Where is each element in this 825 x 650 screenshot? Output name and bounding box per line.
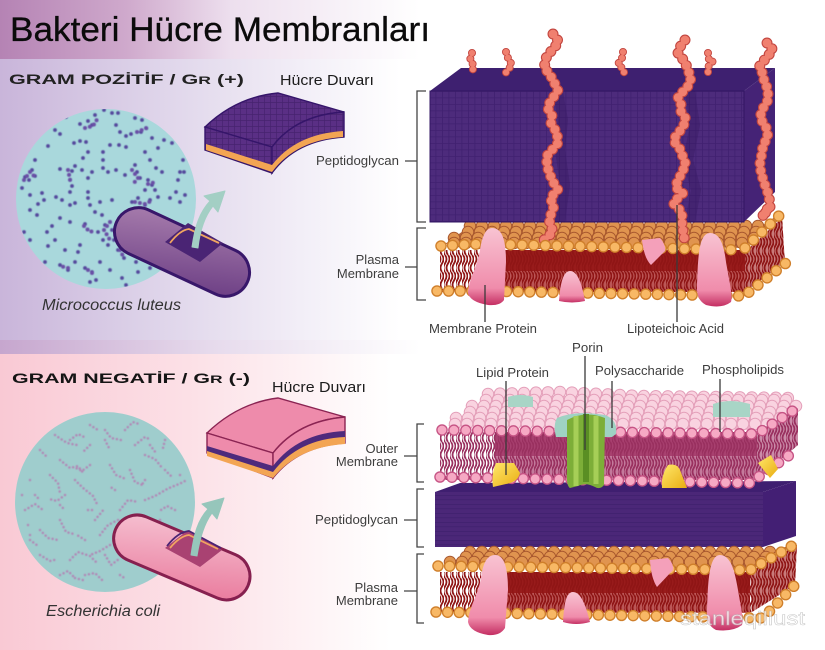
species label: Escherichia coli: Escherichia coli bbox=[46, 603, 161, 620]
watermark: stanleqillust bbox=[680, 609, 806, 630]
chain shadows bbox=[558, 92, 696, 222]
micrograph: Micrococcus luteus bbox=[16, 109, 196, 289]
cell wall block: gram positive bbox=[205, 93, 344, 173]
label: outer membrane: Outer bbox=[365, 441, 399, 456]
outer membrane tails bbox=[440, 408, 798, 480]
cut-away window bbox=[165, 223, 223, 262]
phospholipid heads bbox=[437, 212, 786, 296]
arrow: gram positive zoom bbox=[192, 191, 225, 248]
bracket: peptidoglycan bbox=[405, 91, 426, 222]
plasma membrane bbox=[436, 543, 797, 635]
label: plasma membrane: Membrane bbox=[337, 266, 399, 281]
bacterium: gram positive cell bbox=[107, 200, 257, 304]
polysaccharide bbox=[555, 413, 616, 437]
label: peptidoglycan: Peptidoglycan bbox=[316, 153, 399, 168]
leader line: polysaccharide bbox=[611, 381, 613, 428]
label: cell wall, gram negative: Hücre Duvarı bbox=[272, 380, 366, 396]
label: lipoteichoic acid: Lipoteichoic Acid bbox=[627, 321, 724, 336]
membrane proteins bbox=[468, 228, 732, 306]
arrow: gram negative zoom bbox=[191, 498, 224, 556]
membrane proteins bbox=[468, 555, 743, 635]
heading: gram negative: GRAM NEGATİF / G R (-) bbox=[12, 371, 250, 386]
label: phospholipids: Phospholipids bbox=[702, 362, 784, 377]
label: membrane protein: Membrane Protein bbox=[429, 321, 537, 336]
bracket: plasma membrane bbox=[404, 554, 424, 623]
label: lipid protein: Lipid Protein bbox=[476, 365, 549, 380]
cell wall block: gram negative bbox=[207, 398, 345, 478]
peptidoglycan block bbox=[435, 481, 796, 547]
species label: Micrococcus luteus: Micrococcus luteus bbox=[42, 297, 181, 314]
bracket: peptidoglycan bbox=[404, 489, 424, 547]
plasma membrane surface bbox=[445, 543, 797, 572]
plasma membrane surface bbox=[440, 216, 785, 292]
outer membrane heads bbox=[440, 408, 798, 483]
outer membrane bbox=[440, 392, 798, 488]
leader line: membrane protein bbox=[484, 285, 486, 322]
bracket: plasma membrane bbox=[405, 228, 426, 300]
bracket: outer membrane bbox=[404, 424, 424, 482]
bacterium: gram negative cell bbox=[106, 508, 257, 607]
lipid proteins bbox=[492, 455, 778, 488]
label: porin: Porin bbox=[572, 340, 603, 355]
porin bbox=[567, 414, 605, 488]
heading: gram positive: GRAM POZİTİF / G R (+) bbox=[9, 72, 244, 87]
title: Bakteri Hücre Membranları bbox=[10, 11, 430, 49]
leader line: lipoteichoic acid bbox=[676, 205, 678, 322]
lipoteichoic acid chains bbox=[470, 34, 773, 243]
lipoprotein teal patches bbox=[508, 395, 750, 417]
label: plasma membrane: Plasma bbox=[356, 252, 400, 267]
plasma membrane tails bbox=[440, 545, 797, 613]
label: plasma membrane: Plasma bbox=[355, 580, 399, 595]
label: outer membrane: Membrane bbox=[336, 454, 398, 469]
label: cell wall, gram positive: Hücre Duvarı bbox=[280, 73, 374, 89]
leader line: porin bbox=[584, 356, 586, 450]
leader line: phospholipids bbox=[719, 379, 721, 432]
outer membrane surface bbox=[448, 392, 798, 430]
panel: gram positive envelope diagram bbox=[316, 34, 786, 336]
cut-away window bbox=[165, 530, 222, 567]
leader line: lipid protein bbox=[505, 381, 507, 475]
panel: gram negative envelope diagram bbox=[315, 340, 798, 635]
micrograph: Escherichia coli bbox=[15, 412, 195, 592]
peptidoglycan block bbox=[430, 68, 775, 222]
label: peptidoglycan: Peptidoglycan bbox=[315, 512, 398, 527]
plasma membrane heads bbox=[436, 543, 797, 618]
label: plasma membrane: Membrane bbox=[336, 593, 398, 608]
label: polysaccharide: Polysaccharide bbox=[595, 363, 684, 378]
